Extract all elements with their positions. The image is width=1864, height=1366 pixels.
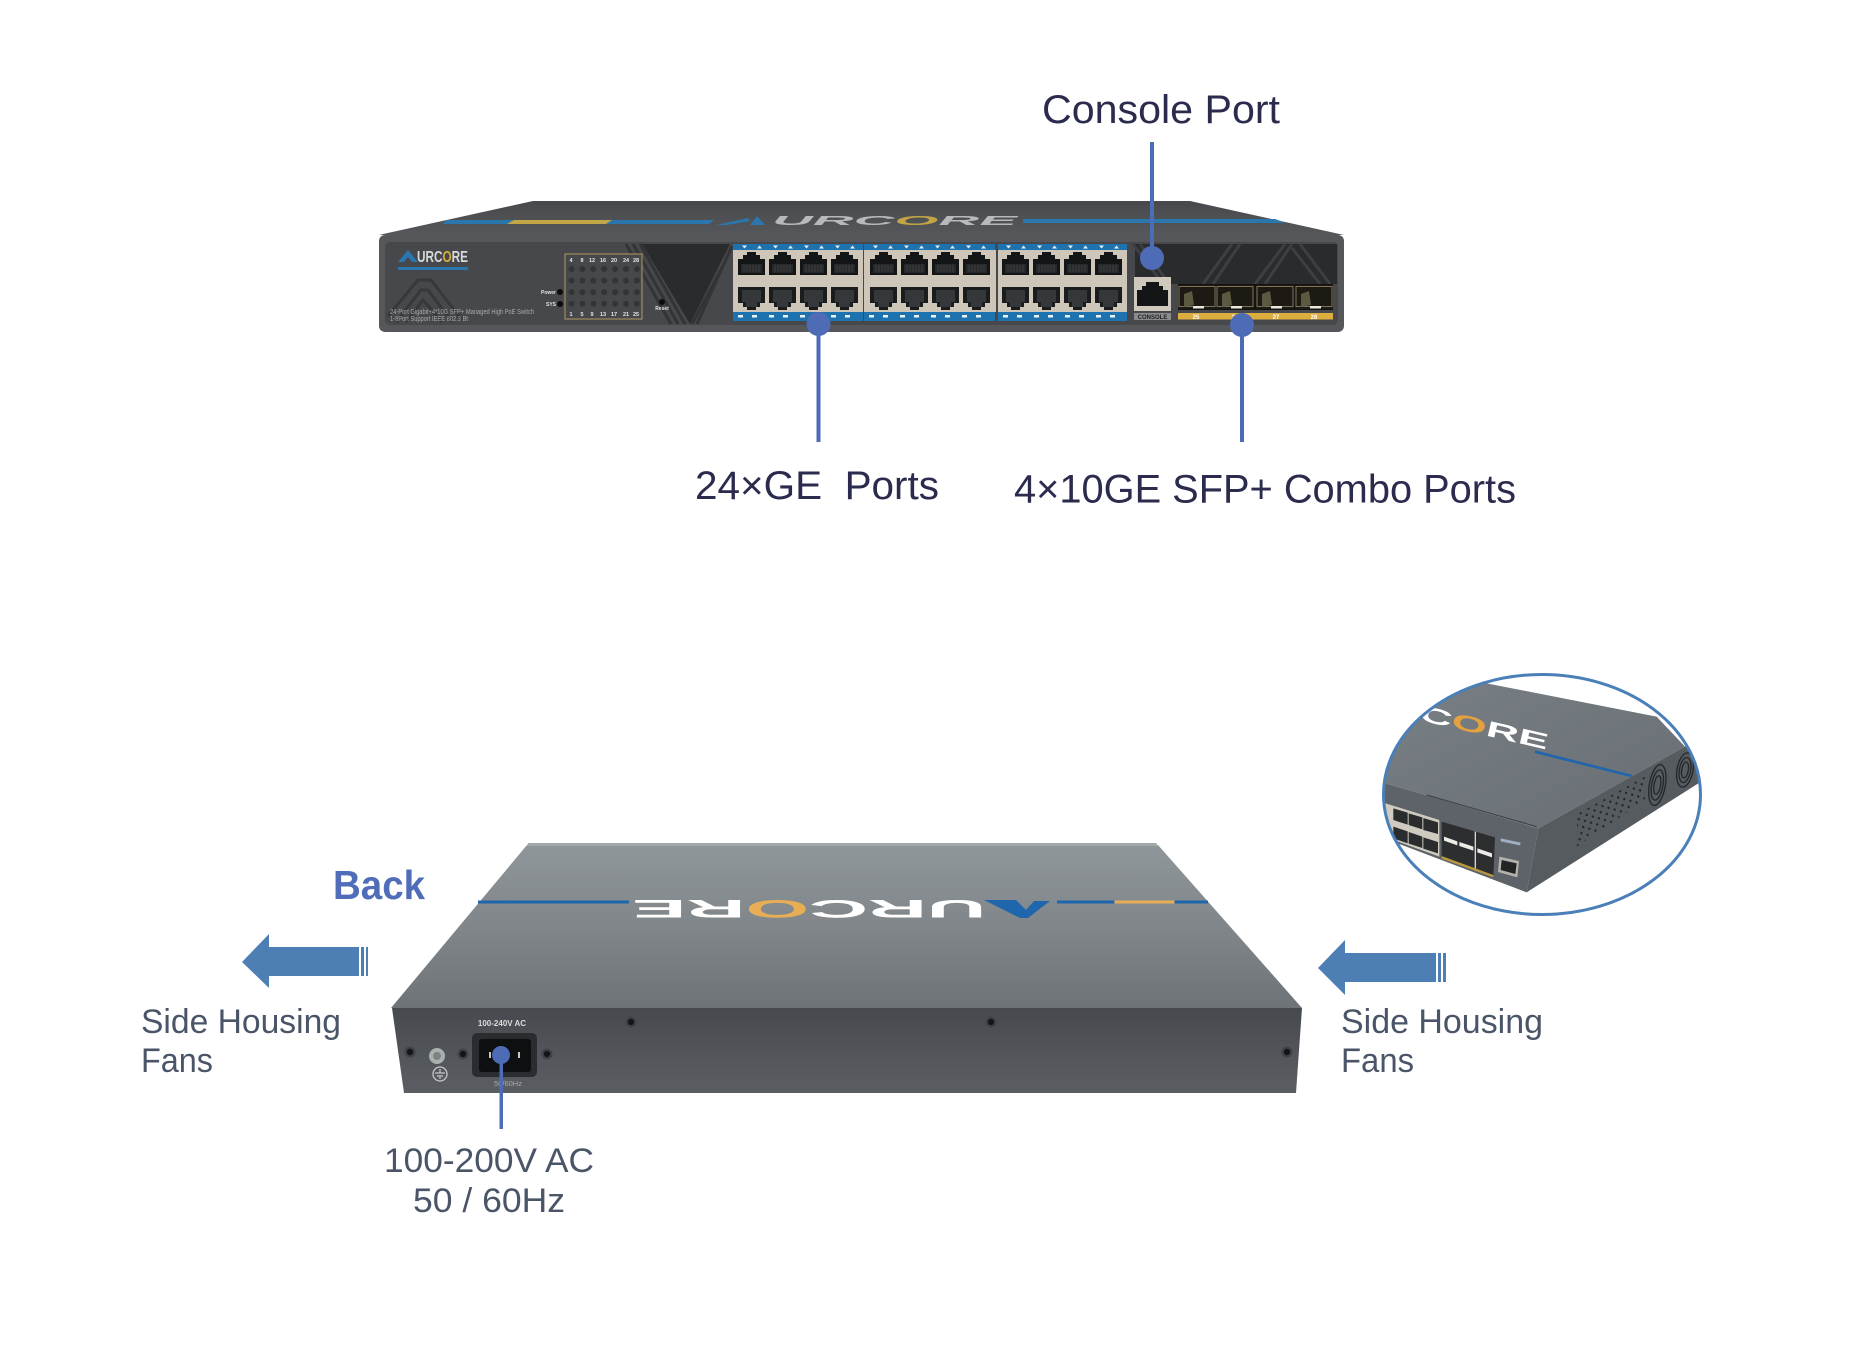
LED indicator grid: 1 [569,312,573,318]
lens fans [1646,752,1696,807]
lens side panel [1527,737,1703,892]
callout line and dot: SFP ports [1230,313,1254,442]
stripe right of logo [1057,900,1208,904]
lens contents [1385,684,1698,892]
LED indicator grid: 25 [633,312,639,318]
lens SFP cages [1442,822,1495,877]
SFP+ combo ports: 25 [1193,315,1200,321]
model description: 1-8Port Support IEEE 802.3 Bt [390,316,468,323]
lens console port [1498,857,1519,877]
top surface stripe, left [442,220,714,224]
SFP+ combo ports: 27 [1273,315,1280,321]
right fan label: Side Housing [1341,1003,1543,1041]
rear top surface [391,845,1302,1008]
rear panel [392,1008,1302,1093]
LED indicator grid: 13 [600,312,606,318]
callout line and dot: console port [1140,142,1164,270]
reset button [655,299,669,312]
upside-down logo [632,894,1050,922]
stripe left of logo [478,900,629,904]
LED indicator grid: 17 [611,312,617,318]
switch top surface [379,201,1344,235]
power socket: 100-240V AC [478,1019,526,1028]
label: console port: Console Port [1042,88,1280,132]
decorative triangle, lower left [388,280,462,322]
lens logo: CORE [1417,701,1551,754]
decorative chevrons, right [1133,244,1337,285]
lens mini logo [1501,838,1521,845]
LED indicator grid: 20 [611,258,617,264]
left fan label: Fans [141,1042,213,1080]
LED indicator grid: 28 [633,258,639,264]
decorative V pattern, left [626,244,732,324]
front switch illustration [379,201,1344,332]
label: power input: 100-200V AC [384,1142,594,1180]
24 gigabit ethernet ports [733,244,1127,321]
mounting screws [404,1016,1292,1058]
lens ring [1384,674,1700,914]
LED indicator grid [565,254,642,319]
brand logo: URCORE [417,249,468,266]
LED indicator grid: 5 [580,312,584,318]
left fan label [141,1003,341,1080]
console port [1134,277,1171,321]
left airflow arrow [242,934,368,988]
SFP+ combo ports: 26 [1232,315,1239,321]
SFP+ combo ports: 28 [1311,315,1318,321]
ground screw and symbol [429,1048,447,1081]
SFP+ combo ports [1178,284,1333,321]
LED indicator grid: 9 [590,312,594,318]
lens front panel [1380,782,1538,892]
label: power input [384,1142,594,1220]
LED indicator grid: 12 [589,258,595,264]
power socket [458,1019,552,1088]
lens top surface [1386,684,1685,828]
top surface logo: URC O RE [772,213,1018,228]
LED indicator grid: 24 [623,258,630,264]
power and system LEDs [541,289,563,308]
top surface stripe, right [1023,219,1286,223]
detail lens: side view of switch [1382,673,1702,916]
upside-down logo: URCORE [632,894,986,922]
LED indicator grid: 8 [580,258,584,264]
right fan label: Fans [1341,1042,1414,1080]
front chassis [379,235,1344,332]
inner face panel [385,242,1338,325]
power and system LEDs: Power [541,290,556,296]
LED indicator grid: 21 [623,312,629,318]
label: power input: 50 / 60Hz [413,1182,565,1220]
heading: back: Back [333,862,425,908]
right airflow arrow [1318,940,1446,995]
callout line and dot: power input [492,1046,510,1129]
rear switch illustration [391,843,1302,1093]
lens chassis seam [1427,795,1537,827]
console port: CONSOLE [1138,315,1167,321]
model description: 24-Port Gigabit+4*10G SFP+ Managed High PoE Switch [390,309,534,316]
lens stripe [1535,752,1632,776]
label: SFP combo ports: 4×10GE SFP+ Combo Ports [1014,468,1516,512]
LED indicator grid: 4 [569,258,573,264]
brand logo [398,249,468,270]
LED indicator grid: 16 [600,258,606,264]
model description [390,309,534,323]
power socket: 50/60Hz [494,1079,522,1088]
top surface seam [527,843,1158,846]
reset button: Reset [655,306,669,312]
right fan label [1341,1003,1543,1080]
lens copper ports [1386,803,1440,857]
callout line and dot: gigabit ports [806,312,830,442]
top surface logo [716,213,1018,228]
left fan label: Side Housing [141,1003,341,1041]
label: gigabit ports: 24×GE Ports [695,464,939,508]
lens vent grill [1577,777,1645,847]
power and system LEDs: SYS [546,302,557,308]
